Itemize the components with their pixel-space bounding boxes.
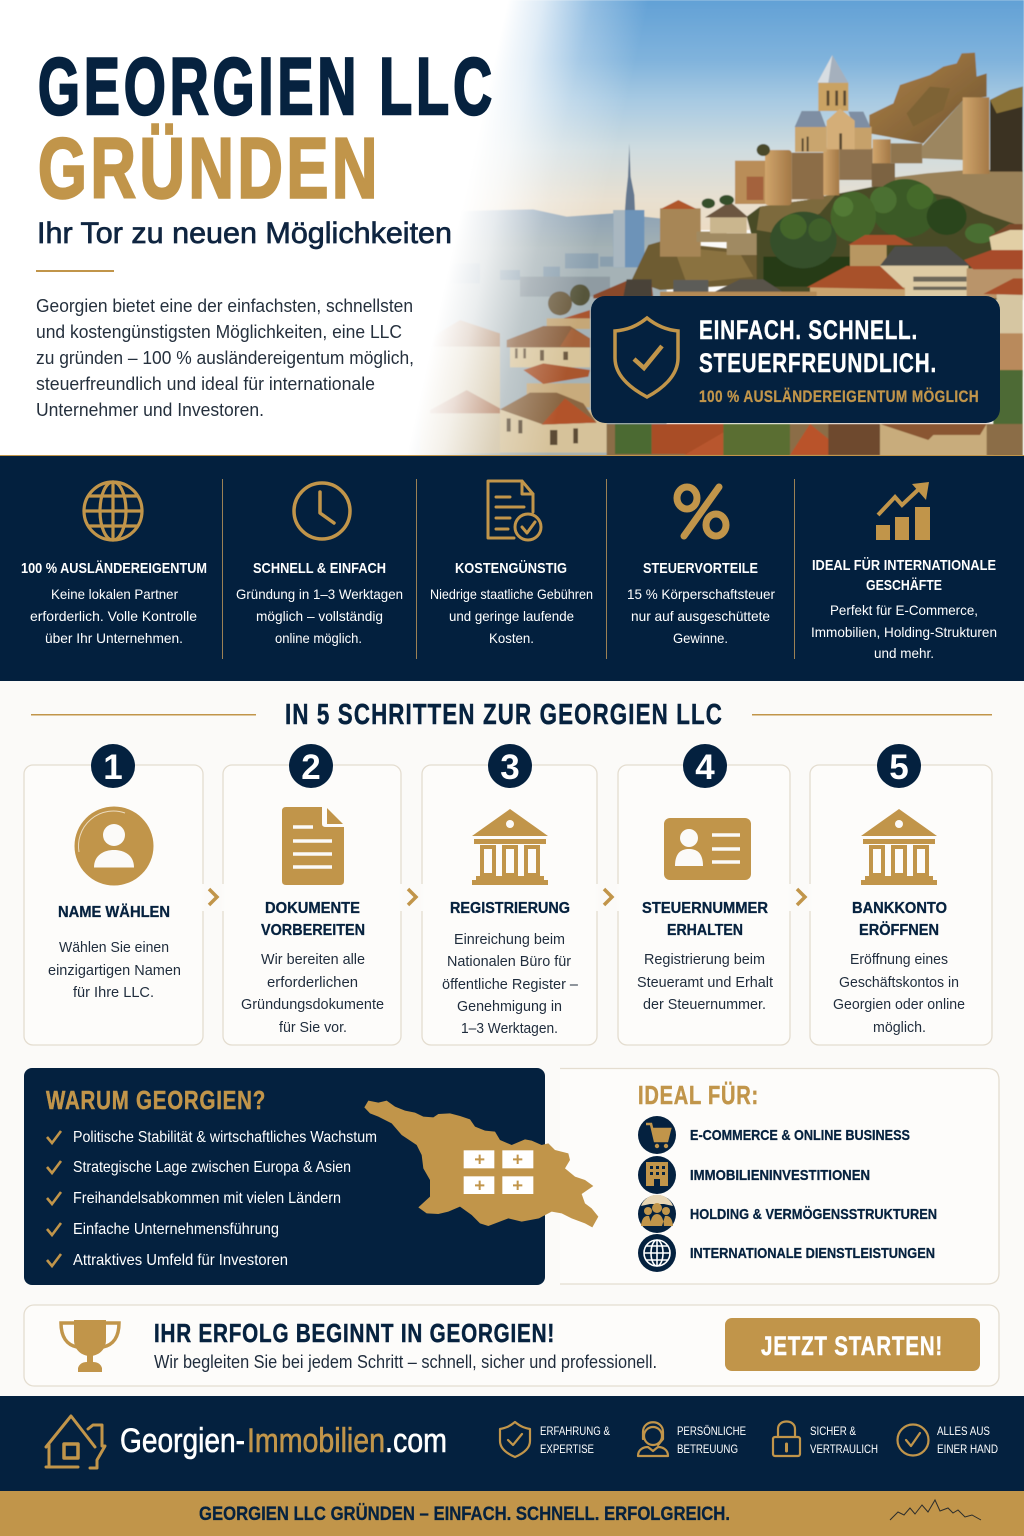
icon: government building: [472, 809, 548, 885]
cliff: [869, 53, 987, 143]
step 5 card: BANKKONTO: [852, 900, 947, 917]
item: e-commerce: E-COMMERCE & ONLINE BUSINESS: [690, 1127, 910, 1144]
icon: clock: [294, 483, 350, 539]
benefit 1: Keine lokalen Partner: [51, 586, 178, 602]
step 3 card: öffentliche Register –: [442, 976, 579, 993]
logo icon: house: [46, 1416, 105, 1468]
main hill: [747, 170, 1023, 300]
call to action panel: IHR ERFOLG BEGINNT IN GEORGIEN!: [154, 1318, 555, 1348]
step 4 card: STEUERNUMMER: [642, 900, 768, 917]
item: holding: [638, 1195, 937, 1233]
step 4 card: [618, 744, 790, 1045]
benefit 3: [430, 481, 593, 646]
step number 5: 5: [889, 748, 909, 787]
icon: person: [74, 806, 154, 886]
benefit 5: Perfekt für E-Commerce,: [830, 602, 978, 618]
church: [795, 55, 872, 152]
intro text: Unternehmer und Investoren.: [36, 400, 264, 420]
flag squares with crosses: [464, 1150, 533, 1194]
step 3 card: REGISTRIERUNG: [450, 900, 570, 917]
lower tower and house: [660, 200, 757, 257]
button: JETZT STARTEN!: [761, 1331, 943, 1361]
step 5 card: ERÖFFNEN: [859, 920, 939, 939]
item: real estate: IMMOBILIENINVESTITIONEN: [690, 1167, 870, 1184]
step 3 card: Genehmigung in: [457, 998, 562, 1015]
item: holding: HOLDING & VERMÖGENSSTRUKTUREN: [690, 1206, 937, 1223]
benefit 3: Niedrige staatliche Gebühren: [430, 586, 593, 602]
icon: skyline sketch: [890, 1500, 981, 1520]
feature: personal support: [638, 1422, 746, 1456]
benefit 2: online möglich.: [275, 630, 362, 646]
step 3 card: 1–3 Werktagen.: [461, 1020, 558, 1037]
call to action panel: [24, 1305, 999, 1386]
fortress: [735, 97, 989, 205]
benefit 4: Gewinne.: [673, 630, 728, 646]
feature: all in one: ALLES AUS: [937, 1424, 990, 1438]
arrow 3: [597, 884, 618, 911]
subtitle: Ihr Tor zu neuen Möglichkeiten: [37, 217, 452, 250]
title: GRÜNDEN: [38, 122, 381, 216]
benefit 1: [21, 482, 207, 646]
benefit 1: über Ihr Unternehmen.: [45, 630, 183, 646]
rooftops under badge: [607, 424, 1023, 456]
step 4 card: Registrierung beim: [644, 951, 765, 968]
intro text: steuerfreundlich und ideal für internationale: [36, 374, 375, 394]
step number 4: [683, 744, 727, 788]
bottom gold strip: [0, 1491, 1024, 1536]
step 3 card: [422, 744, 597, 1045]
checklist: Politische Stabilität & wirtschaftliches Wachstum: [73, 1129, 377, 1146]
step 1 card: Wählen Sie einen: [59, 939, 169, 956]
map of Georgia: [364, 1101, 598, 1227]
benefit 1: erforderlich. Volle Kontrolle: [30, 608, 197, 624]
houses left, fading into white: [420, 310, 607, 453]
intro text: und kostengünstigsten Möglichkeiten, eine LLC: [36, 322, 402, 342]
panel: ideal für: [560, 1068, 999, 1284]
step 1 card: für Ihre LLC.: [73, 984, 154, 1001]
panel: warum georgien: [24, 1068, 598, 1285]
benefit 5: und mehr.: [874, 645, 934, 661]
benefits band: [0, 456, 1024, 681]
benefit 3: KOSTENGÜNSTIG: [455, 560, 567, 577]
icon: globe: [84, 482, 142, 540]
title: GEORGIEN LLC: [38, 42, 496, 132]
step 2 card: [223, 744, 401, 1045]
panel: warum georgien: WARUM GEORGIEN?: [46, 1085, 266, 1115]
step 1 card: [24, 744, 203, 1045]
benefit 2: [236, 483, 403, 646]
checklist: Strategische Lage zwischen Europa & Asien: [73, 1159, 351, 1176]
call to action panel: Wir begleiten Sie bei jedem Schritt – schnell, sicher und professionell.: [154, 1352, 657, 1372]
benefit 4: STEUERVORTEILE: [643, 560, 758, 577]
step 4 card: der Steuernummer.: [643, 996, 766, 1013]
step number 5: [877, 744, 921, 788]
benefit 2: SCHNELL & EINFACH: [253, 560, 386, 577]
benefit 5: GESCHÄFTE: [866, 577, 942, 594]
feature: all in one: [898, 1424, 998, 1456]
hero photo: Tbilisi fortress and old town: [380, 0, 1024, 460]
checklist: Attraktives Umfeld für Investoren: [73, 1252, 288, 1269]
houses centre: [593, 279, 817, 298]
feature: personal support: BETREUUNG: [677, 1442, 738, 1456]
step number 3: [488, 744, 532, 788]
badge heading: EINFACH. SCHNELL.: [699, 315, 918, 345]
title: [38, 42, 496, 216]
benefit 3: Kosten.: [489, 630, 534, 646]
panel: ideal für: IDEAL FÜR:: [638, 1080, 759, 1110]
benefit 1: 100 % AUSLÄNDEREIGENTUM: [21, 560, 207, 577]
step 1 card: NAME WÄHLEN: [58, 903, 170, 921]
feature: all in one: EINER HAND: [937, 1442, 998, 1456]
benefit 2: Gründung in 1–3 Werktagen: [236, 586, 403, 602]
icon: percent: [677, 487, 726, 536]
feature: secure: VERTRAULICH: [810, 1442, 878, 1456]
steps heading: IN 5 SCHRITTEN ZUR GEORGIEN LLC: [285, 699, 723, 731]
benefit 4: nur auf ausgeschüttete: [631, 608, 770, 624]
hero badge: [591, 296, 1000, 423]
step number 2: [289, 744, 333, 788]
step number 1: [91, 744, 135, 788]
logo wordmark: Georgien-: [120, 1422, 245, 1460]
step 5 card: Eröffnung eines: [850, 951, 948, 968]
gold hairline: [0, 455, 1024, 456]
bottom gold strip: GEORGIEN LLC GRÜNDEN – EINFACH. SCHNELL. ERFOLGREICH.: [199, 1504, 730, 1525]
benefit 4: [627, 487, 775, 646]
step 2 card: Gründungsdokumente: [241, 996, 384, 1013]
step 2 card: Wir bereiten alle: [261, 951, 365, 968]
icon: trophy: [61, 1320, 119, 1372]
icon: bank: [861, 809, 937, 885]
checklist: [47, 1129, 377, 1269]
spur below lower tower: [632, 242, 763, 290]
feature: experience: [500, 1422, 610, 1457]
step 4 card: ERHALTEN: [667, 922, 743, 939]
icon: rising bar chart: [876, 482, 930, 540]
badge heading: [699, 315, 937, 378]
feature: experience: EXPERTISE: [540, 1442, 594, 1456]
step 4 card: Steueramt und Erhalt: [637, 974, 774, 991]
feature: experience: ERFAHRUNG &: [540, 1424, 610, 1438]
arrow 1: [203, 884, 223, 911]
benefit 5: Immobilien, Holding-Strukturen: [811, 624, 997, 640]
benefit 3: und geringe laufende: [449, 608, 574, 624]
trees: [548, 144, 995, 315]
step 5 card: möglich.: [873, 1019, 926, 1036]
white fade over photo: [0, 0, 720, 456]
gold rule: [36, 270, 114, 272]
footer band: [0, 1396, 1024, 1491]
button: [725, 1318, 980, 1371]
arrow 2: [401, 884, 422, 911]
intro text: Georgien bietet eine der einfachsten, schnellsten: [36, 296, 413, 316]
step 1 card: einzigartigen Namen: [48, 962, 181, 979]
step 5 card: [810, 744, 992, 1045]
intro text: [36, 296, 414, 420]
houses right: [807, 224, 1023, 460]
logo wordmark: .com: [385, 1422, 447, 1460]
feature: secure: [773, 1422, 878, 1456]
logo wordmark: Immobilien: [247, 1422, 385, 1460]
intro text: zu gründen – 100 % ausländereigentum möglich,: [36, 348, 414, 368]
feature: personal support: PERSÖNLICHE: [677, 1424, 746, 1438]
icon: shield with check: [615, 318, 678, 397]
icon: document: [282, 807, 344, 885]
checklist: Freihandelsabkommen mit vielen Ländern: [73, 1190, 341, 1207]
step number 4: 4: [695, 748, 715, 787]
step number 3: 3: [500, 748, 520, 787]
item: international services: [638, 1234, 935, 1272]
icon: ID card: [664, 818, 751, 880]
step 2 card: erforderlichen: [267, 974, 358, 991]
step 3 card: Nationalen Büro für: [447, 953, 571, 970]
step number 1: 1: [103, 748, 123, 787]
benefit 5: [811, 482, 997, 661]
logo wordmark: [120, 1422, 447, 1460]
item: international services: INTERNATIONALE DIENSTLEISTUNGEN: [690, 1245, 935, 1262]
item: e-commerce: [638, 1116, 910, 1154]
step 5 card: Geschäftskontos in: [839, 974, 959, 991]
icon: document with check: [488, 481, 541, 540]
step 2 card: für Sie vor.: [279, 1019, 347, 1036]
step 5 card: Georgien oder online: [833, 996, 965, 1013]
feature: secure: SICHER &: [810, 1424, 856, 1438]
arrow 4: [790, 884, 810, 911]
step 2 card: VORBEREITEN: [261, 922, 365, 939]
checklist: Einfache Unternehmensführung: [73, 1221, 279, 1238]
benefit 2: möglich – vollständig: [256, 608, 383, 624]
benefit 5: IDEAL FÜR INTERNATIONALE: [812, 557, 996, 574]
benefit 4: 15 % Körperschaftsteuer: [627, 586, 775, 602]
step 2 card: DOKUMENTE: [265, 900, 360, 917]
step 3 card: Einreichung beim: [454, 931, 565, 948]
city buildings: [450, 253, 613, 283]
step number 2: 2: [301, 748, 321, 787]
item: real estate: [638, 1156, 870, 1194]
high-rise tower: [613, 143, 644, 267]
badge heading: STEUERFREUNDLICH.: [699, 348, 937, 378]
